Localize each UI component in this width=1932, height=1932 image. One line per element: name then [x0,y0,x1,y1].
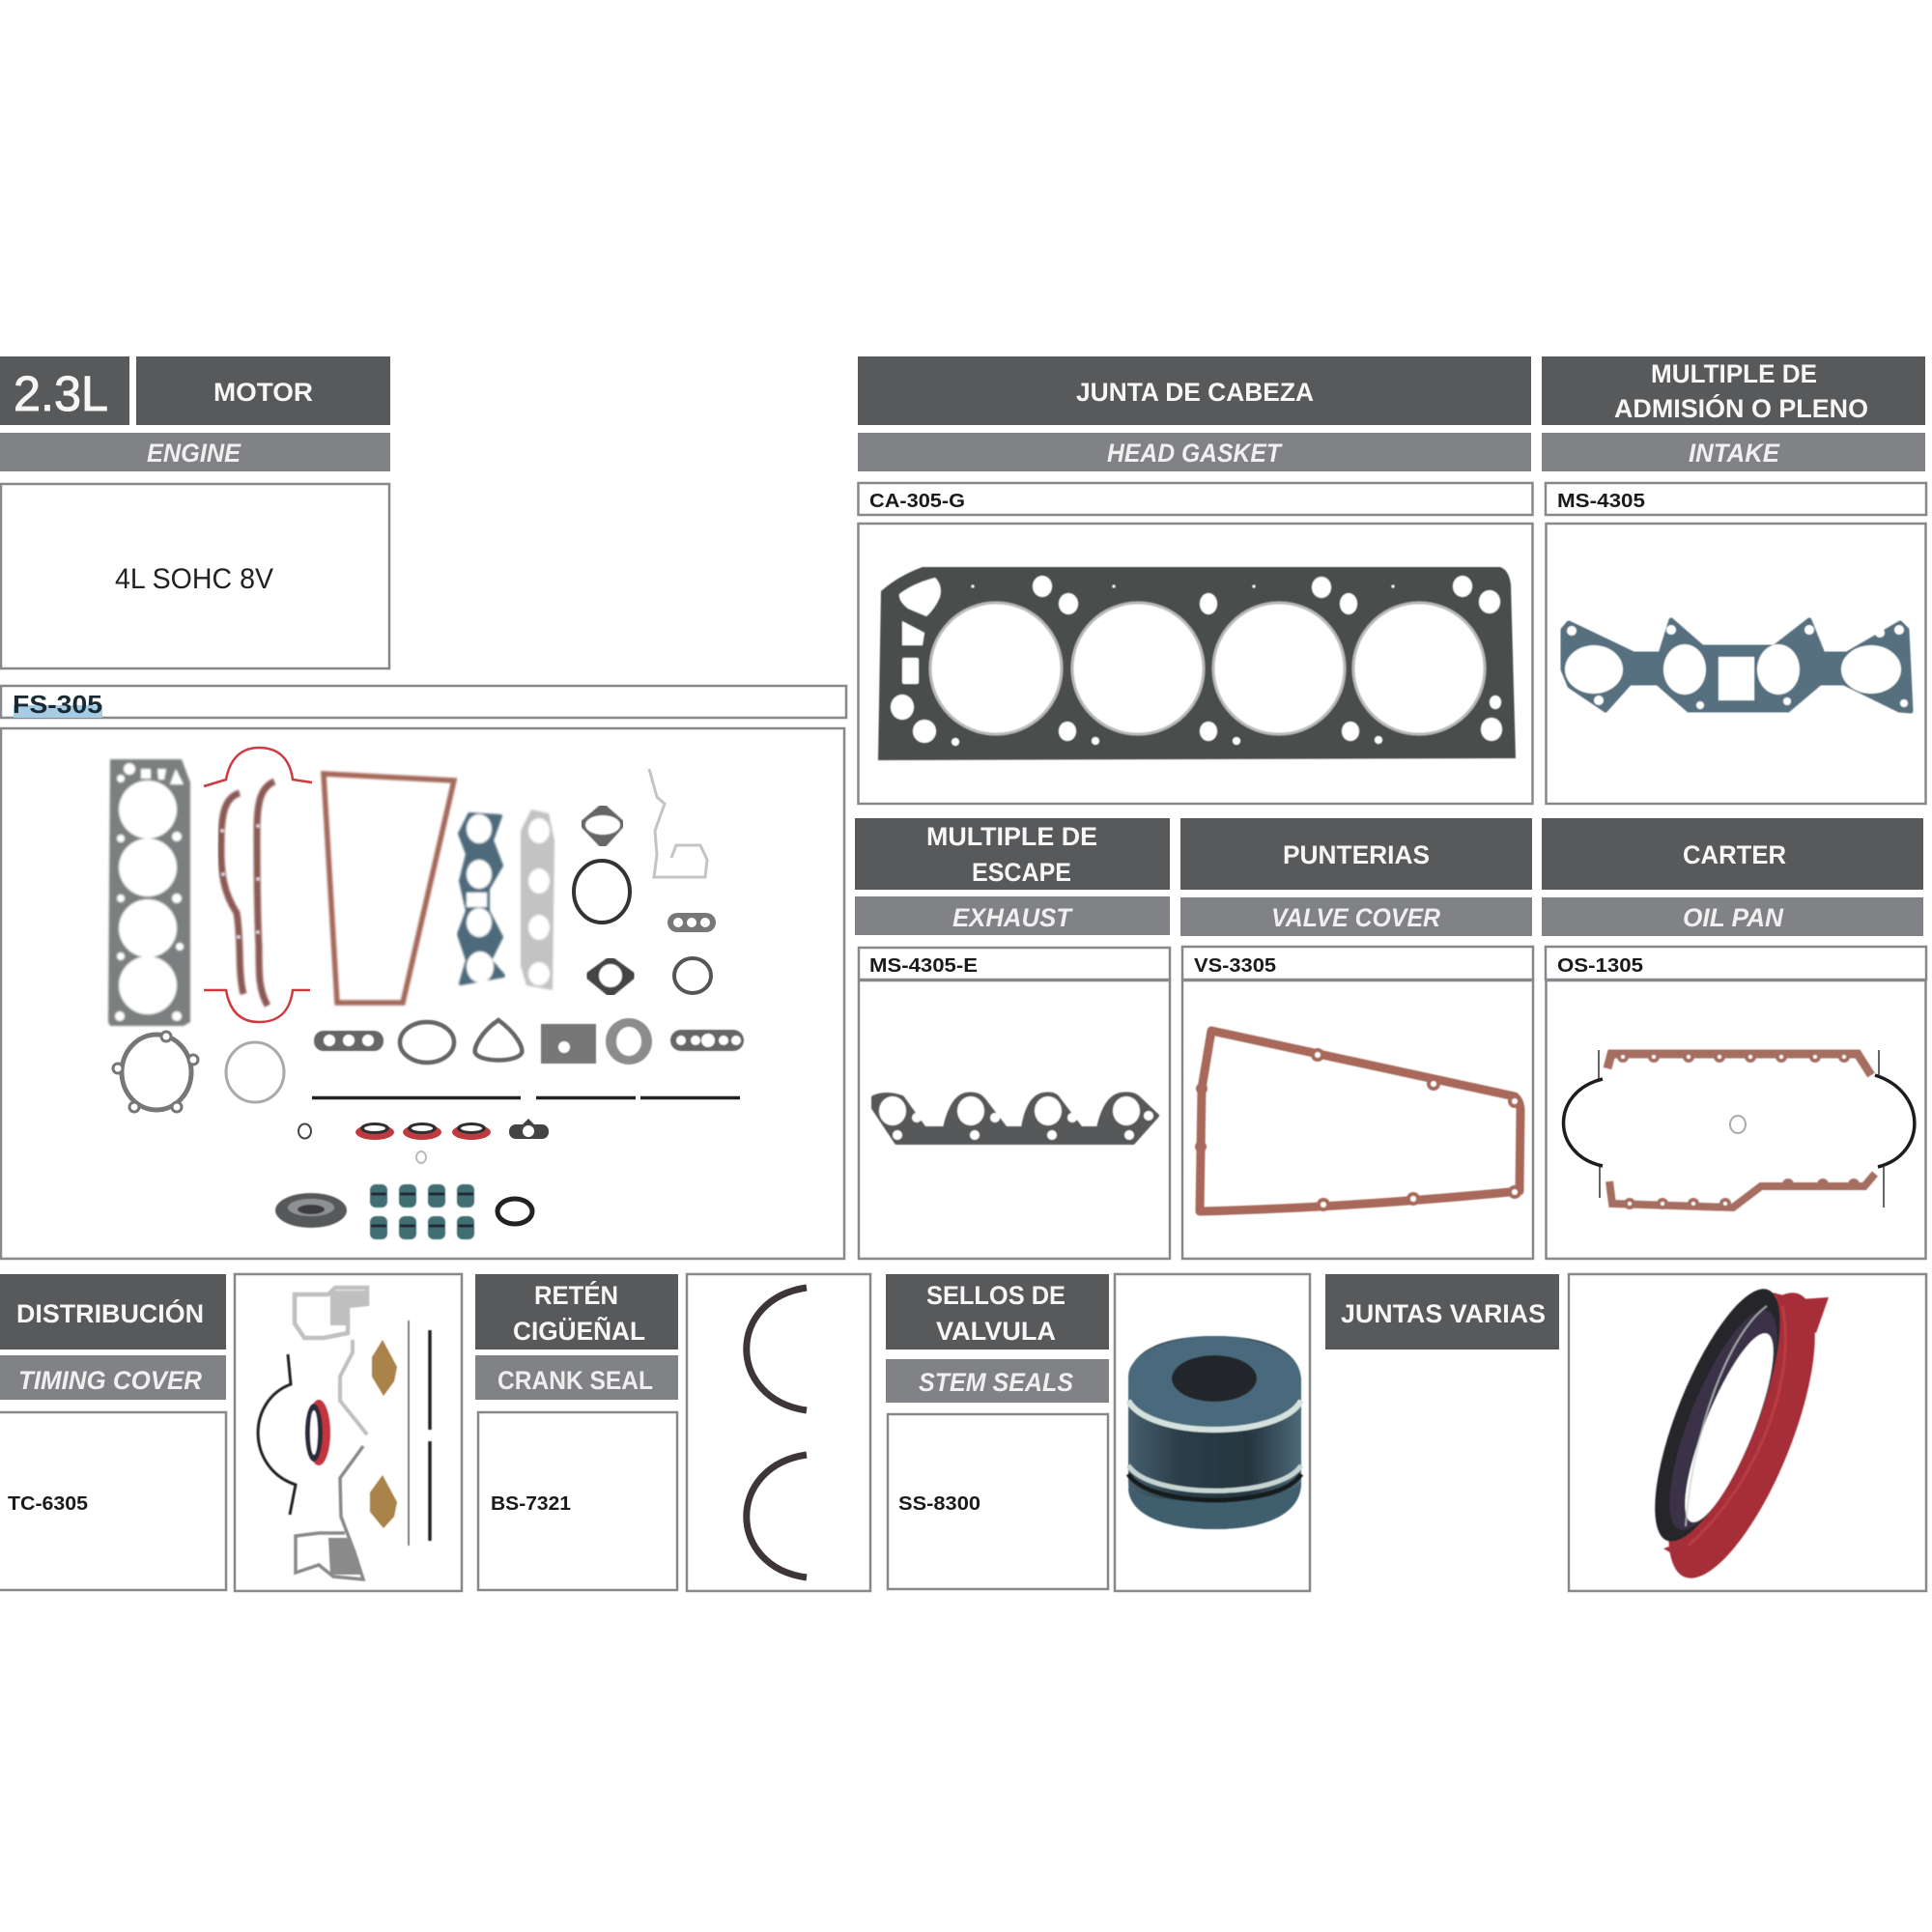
icon: grey exhaust gasket [521,810,554,990]
subheading: engine: ENGINE [147,439,242,468]
part number: MS-4305: MS-4305 [1557,491,1645,512]
panel: intake [1542,356,1926,804]
heading: reten ciguenal: RETÉN [534,1280,618,1310]
subheading: intake: INTAKE [1689,439,1780,468]
heading: carter [1542,818,1923,890]
panel: valve cover [1180,818,1533,1259]
part number: CA-305-G [858,483,1532,515]
icon: blue intake gasket [459,814,503,983]
heading: distribucion: DISTRIBUCIÓN [16,1298,204,1328]
heading: punterias [1180,818,1532,890]
panel: head gasket [858,356,1532,804]
icon: hexagon ring gasket [113,1032,198,1112]
part number: TC-6305: TC-6305 [8,1493,88,1515]
heading: multiple de escape: ESCAPE [972,858,1071,887]
text block: engine type: 4L SOHC 8V [115,563,273,595]
icon: small oval gasket [583,808,621,844]
subheading: engine [0,433,390,471]
part number: SS-8300: SS-8300 [898,1493,980,1515]
icon: vertical head gasket [108,759,190,1026]
subheading: exhaust: EXHAUST [952,903,1073,932]
heading: reten ciguenal [475,1274,678,1350]
panel: stem seals [886,1274,1310,1591]
heading: multiple de admision o pleno: MULTIPLE DE [1651,359,1817,388]
panel: engine [0,356,390,668]
part number: MS-4305-E: MS-4305-E [869,955,978,977]
subheading: crank seal [475,1355,678,1400]
subheading: stem seals [886,1359,1109,1403]
heading: juntas varias [1325,1274,1559,1350]
panel: exhaust [855,818,1170,1259]
icon: valve stem seals [370,1184,474,1239]
part number: MS-4305-E [859,948,1170,980]
heading: sellos de valvula: SELLOS DE [926,1281,1065,1310]
icon: black strip seals [312,1096,740,1099]
image: stem seal [1115,1274,1310,1591]
panel: timing cover [0,1274,462,1591]
subheading: timing cover [0,1355,226,1400]
heading: distribucion [0,1274,226,1350]
heading: carter: CARTER [1683,840,1786,869]
icon: light timing gasket [649,769,707,877]
panel: crank seal [475,1274,870,1591]
part number: TC-6305 [0,1412,226,1590]
badge: engine size 2.3L: 2.3L [14,366,108,421]
heading: motor: MOTOR [213,378,313,407]
part number: FS-305 [1,686,846,719]
subheading: exhaust [855,896,1170,935]
part number: SS-8300 [888,1414,1108,1589]
icon: side rail gaskets [220,781,274,1006]
part number: OS-1305: OS-1305 [1557,955,1643,977]
icon: small three hole gasket [668,913,716,932]
heading: junta de cabeza: JUNTA DE CABEZA [1076,378,1314,407]
heading: junta de cabeza [858,356,1531,425]
image: crank seal halves [687,1274,870,1591]
icon: crank seal [275,1193,347,1228]
image: timing cover gaskets [235,1274,462,1591]
image: exhaust gasket [859,980,1170,1259]
subheading: intake [1542,433,1925,471]
part number: BS-7321 [478,1412,677,1590]
subheading: head gasket: HEAD GASKET [1107,439,1283,468]
part number: VS-3305: VS-3305 [1194,955,1276,977]
heading: reten ciguenal: CIGÜEÑAL [513,1316,645,1346]
part number: OS-1305 [1546,947,1926,980]
icon: valve cover gasket [324,774,454,1003]
icon: black ring [574,861,630,923]
image: head gasket [858,524,1532,804]
panel: full gasket set image [1,728,844,1259]
heading: multiple de escape [855,818,1170,890]
panel: misc gaskets [1325,1274,1926,1596]
subheading: oil pan [1542,897,1923,936]
heading: sellos de valvula: VALVULA [936,1317,1056,1346]
heading: motor [136,356,390,425]
subheading: oil pan: OIL PAN [1683,903,1783,932]
icon: row of small gaskets [314,1018,744,1065]
image: oil pan gasket [1546,980,1926,1259]
heading: sellos de valvula [886,1274,1109,1350]
icon: red end seals [204,748,312,1022]
image: red oil seal [1569,1274,1926,1596]
subheading: valve cover: VALVE COVER [1271,903,1440,932]
subheading: valve cover [1180,897,1532,936]
heading: juntas varias: JUNTAS VARIAS [1341,1299,1546,1328]
heading: multiple de escape: MULTIPLE DE [926,822,1097,851]
icon: thin grey ring [226,1042,284,1102]
heading: punterias: PUNTERIAS [1283,840,1430,869]
badge: engine size 2.3L [0,356,129,425]
heading: multiple de admision o pleno: ADMISIÓN O PLENO [1614,393,1868,423]
part number: CA-305-G: CA-305-G [869,491,965,512]
image: valve cover gasket [1182,980,1533,1259]
icon: black o-ring [497,1199,532,1224]
part number: BS-7321: BS-7321 [491,1493,571,1515]
icon: dark round gasket [589,960,632,993]
heading: multiple de admision o pleno [1542,356,1925,425]
panel: oil pan [1542,818,1926,1259]
part number: VS-3305 [1182,947,1533,980]
text block: engine type [1,484,389,668]
image: intake gasket [1546,524,1926,804]
subheading: crank seal: CRANK SEAL [497,1366,653,1395]
subheading: timing cover: TIMING COVER [18,1366,202,1395]
icon: small grey ring [674,958,711,993]
subheading: head gasket [858,433,1531,471]
subheading: stem seals: STEM SEALS [919,1368,1073,1397]
part number: MS-4305 [1546,483,1926,515]
icon: small rings and seals row [298,1119,549,1163]
part number: FS-305: FS-305 [13,690,102,719]
